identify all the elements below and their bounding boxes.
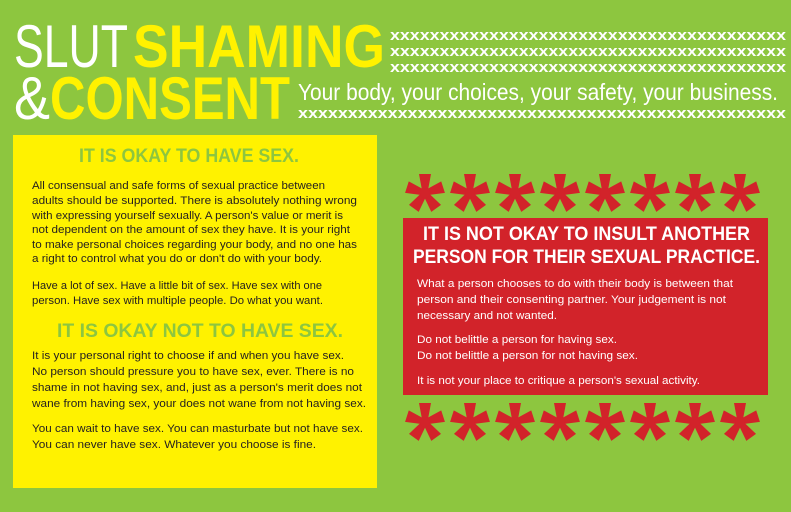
title: SHAMING [133, 13, 385, 80]
text block: have sex: All consensual and safe forms of sexual practice between [32, 180, 325, 192]
text block: insult: necessary and not wanted. [417, 310, 557, 322]
x pattern rows: xxxxxxxxxxxxxxxxxxxxxxxxxxxxxxxxxxxxxxxx [390, 59, 787, 76]
text block: not have sex: No person should pressure you to have sex, ever. There is no [32, 366, 354, 378]
text block: not have sex: You can wait to have sex. You can masturbate but not have sex. [32, 423, 363, 435]
text block: insult: Do not belittle a person for not having sex. [417, 350, 638, 362]
title: SLUT [14, 13, 128, 80]
title [14, 13, 385, 132]
text block: have sex [31, 180, 357, 307]
heading: not okay: IT IS NOT OKAY TO INSULT ANOTHER [423, 224, 750, 245]
text block: have sex: with expressing yourself sexually. A person's value or merit is [31, 210, 343, 222]
x pattern rows: xxxxxxxxxxxxxxxxxxxxxxxxxxxxxxxxxxxxxxxxxxxxxxxxx [298, 105, 787, 122]
panel: okay to have sex [13, 135, 377, 488]
heading: okay to have sex: IT IS OKAY TO HAVE SEX. [79, 146, 299, 167]
title: & [14, 65, 50, 132]
text block: insult: Do not belittle a person for having sex. [417, 334, 617, 346]
text block: have sex: to make personal choices regarding your body, and no one has [32, 239, 357, 251]
text block: insult: person and their consenting partner. Your judgement is not [417, 294, 727, 306]
text block: insult: It is not your place to critique a person's sexual activity. [417, 375, 700, 387]
x pattern rows [298, 27, 787, 122]
text block: have sex: person. Have sex with multiple people. Do what you want. [32, 295, 323, 307]
panel: not okay to insult [403, 218, 768, 395]
asterisks bottom [405, 403, 760, 441]
x pattern rows: xxxxxxxxxxxxxxxxxxxxxxxxxxxxxxxxxxxxxxxx [390, 27, 787, 44]
text block: insult [417, 278, 734, 387]
text block: not have sex [31, 350, 366, 451]
text block: insult: What a person chooses to do with their body is between that [417, 278, 734, 290]
panel: not okay to insult: PERSON FOR THEIR SEXUAL PRACTICE. [413, 247, 760, 268]
text block: have sex: not dependent on the amount of sex they have. It is your right [32, 224, 351, 236]
asterisks top [405, 174, 760, 212]
title: CONSENT [50, 65, 290, 132]
heading: okay not to have sex: IT IS OKAY NOT TO HAVE SEX. [57, 321, 343, 342]
text block: have sex: Have a lot of sex. Have a little bit of sex. Have sex with one [32, 280, 322, 292]
text block: not have sex: It is your personal right to choose if and when you have sex. [32, 350, 344, 362]
x pattern rows: xxxxxxxxxxxxxxxxxxxxxxxxxxxxxxxxxxxxxxxx [390, 43, 787, 60]
text block: not have sex: You can never have sex. Whatever you choose is fine. [32, 439, 316, 451]
text block: have sex: adults should be supported. There is absolutely nothing wrong [32, 195, 357, 207]
text block: not have sex: shame in not having sex, and, just as a person's merit does not [32, 382, 363, 394]
text block: have sex: a right to control what you do or don't do with your body. [32, 253, 322, 265]
text block: not have sex: wane from having sex, your does not wane from not having sex. [31, 398, 366, 410]
